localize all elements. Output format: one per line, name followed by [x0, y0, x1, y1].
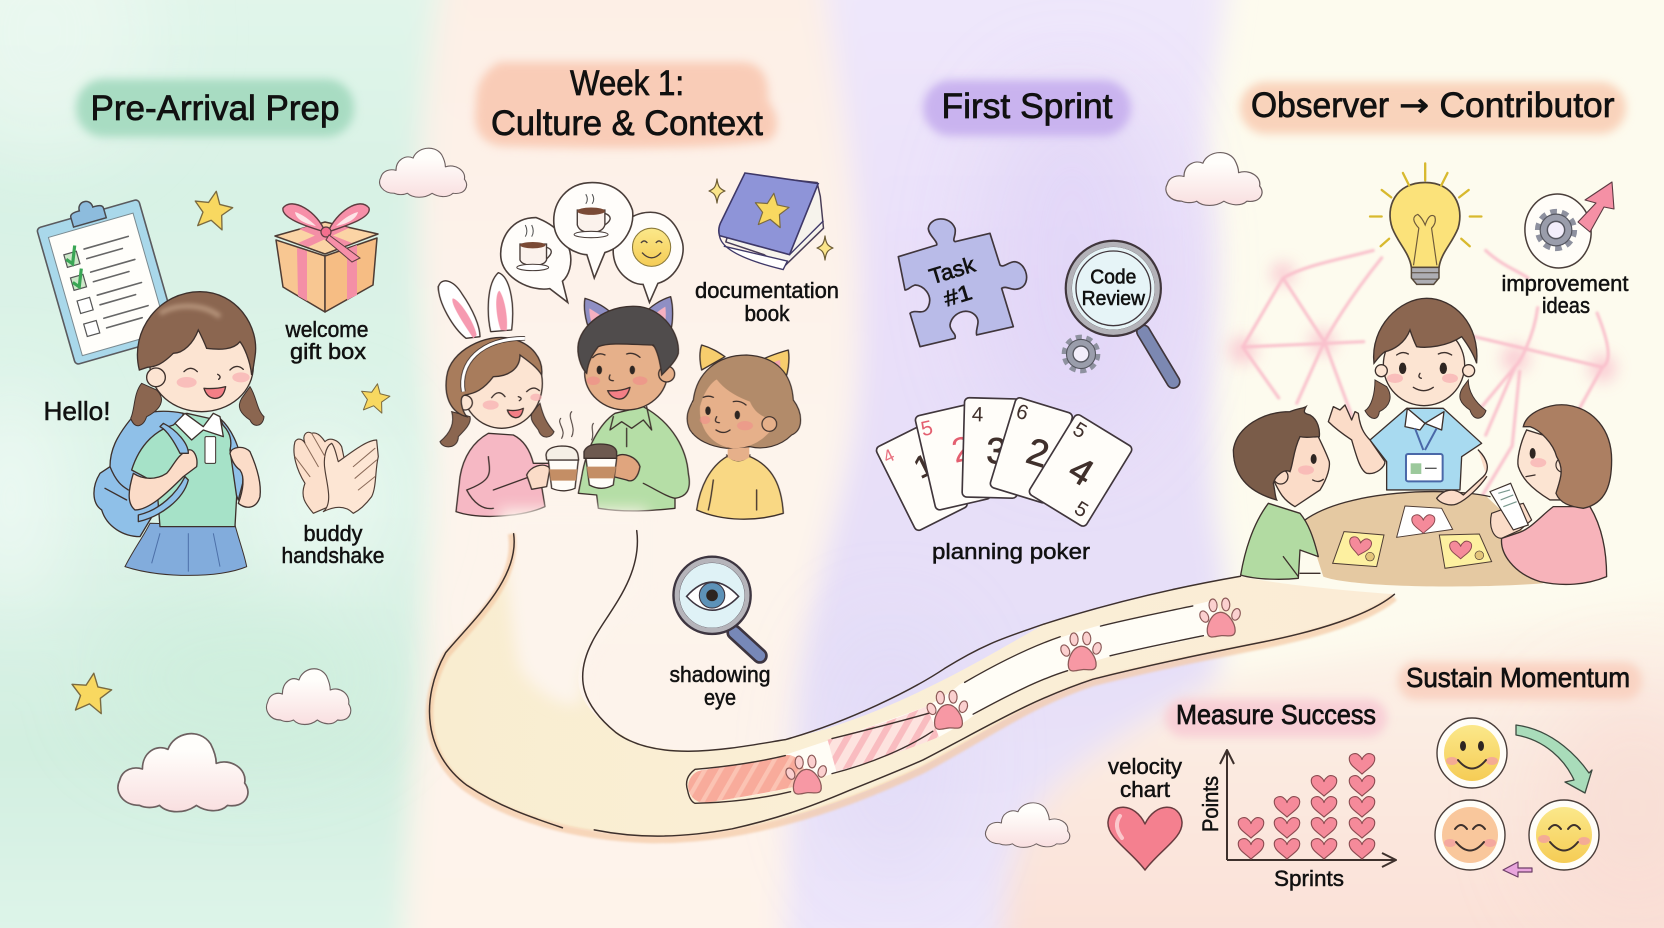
decoration: stars and clouds	[69, 148, 467, 812]
heading pill: Pre-Arrival Prep	[76, 79, 354, 137]
icon: star	[191, 188, 235, 231]
axes	[1220, 750, 1396, 867]
boy listening	[1233, 407, 1329, 579]
scene: team around table	[1233, 298, 1612, 586]
label: Hello: Hello!	[44, 396, 110, 426]
label: welcome gift box: welcome	[285, 317, 368, 342]
label: velocity chart	[1108, 754, 1182, 802]
label: improvement ideas: ideas	[1542, 293, 1590, 318]
label: velocity chart: chart	[1120, 777, 1170, 802]
icon: star	[358, 381, 392, 414]
icon: planning poker cards: 5	[919, 416, 935, 441]
icon: planning poker cards: 2	[948, 429, 976, 471]
heading pill: Pre-Arrival Prep: Pre-Arrival Prep	[90, 89, 340, 128]
icon: improvement gear and arrow	[1520, 182, 1614, 272]
paw prints	[783, 754, 830, 795]
icon: buddy handshake	[294, 432, 378, 513]
label: velocity chart: velocity	[1108, 754, 1182, 779]
label: welcome gift box	[285, 317, 368, 364]
icon: code review magnifier	[1068, 243, 1173, 382]
label: welcome gift box: gift box	[290, 339, 366, 364]
heading pill: Week 1 Culture & Context: Culture & Context	[491, 104, 763, 143]
icon: smiley right	[1529, 800, 1599, 870]
icon: sparkles	[709, 179, 833, 260]
column of hearts 4	[1349, 754, 1375, 859]
label: planning poker: planning poker	[932, 539, 1090, 564]
heading pill: Observer to Contributor	[1240, 82, 1626, 134]
panel: observer to contributor	[1229, 82, 1628, 586]
woman with phone	[1490, 405, 1612, 584]
heading pill: Week 1 Culture & Context: Week 1:	[570, 64, 684, 103]
heading pill: Measure Success: Measure Success	[1176, 699, 1376, 730]
icon: puzzle piece task 1: Task	[926, 251, 979, 289]
icon: code review magnifier: Review	[1082, 287, 1145, 310]
cloud	[986, 803, 1070, 847]
characters: three friends with coffee	[438, 273, 801, 519]
icon: planning poker cards	[875, 397, 1133, 532]
girl with yellow cat ears	[687, 345, 801, 519]
icon: planning poker cards: 5	[1069, 418, 1091, 443]
column of hearts 2	[1274, 797, 1300, 859]
label: shadowing eye: shadowing	[670, 662, 770, 687]
icon: smiley left	[1435, 800, 1505, 870]
chart: velocity hearts	[1198, 750, 1396, 891]
table	[1305, 492, 1543, 586]
label: improvement ideas	[1502, 271, 1628, 318]
heading pill: Observer to Contributor: Observer	[1251, 86, 1389, 125]
icon: gear	[1065, 338, 1097, 370]
icon: planning poker cards: 1	[909, 447, 939, 485]
label: improvement ideas: improvement	[1502, 271, 1628, 296]
icon: puzzle piece task 1: #1	[941, 279, 975, 312]
icon: code review magnifier: Code	[1090, 265, 1136, 288]
panel: sustain momentum	[1398, 662, 1642, 877]
heading pill: First Sprint	[923, 80, 1131, 136]
heading pill: Sustain Momentum: Sustain Momentum	[1406, 662, 1630, 693]
sticky notes	[1333, 506, 1492, 568]
icon: planning poker cards: 2	[1022, 429, 1054, 475]
panel: measure success	[986, 699, 1396, 891]
icon: clipboard checklist	[33, 187, 178, 365]
column of hearts 3	[1311, 776, 1337, 859]
heading pill: Observer to Contributor: →	[1399, 86, 1429, 124]
character: girl with backpack	[94, 292, 264, 575]
road body	[429, 531, 1394, 836]
icon: planning poker cards: 4	[880, 445, 898, 467]
panel: pre-arrival prep	[33, 79, 467, 812]
label: buddy handshake: handshake	[282, 543, 384, 568]
label: documentation book: documentation	[695, 278, 839, 303]
boy with cat ears	[578, 297, 689, 511]
label: documentation book: book	[744, 301, 790, 326]
icon: big heart	[1108, 807, 1182, 870]
icon: puzzle piece task 1	[898, 219, 1027, 347]
label: buddy handshake: buddy	[304, 521, 362, 546]
heading pill: Observer to Contributor: Contributor	[1440, 86, 1615, 125]
label: buddy handshake	[282, 521, 384, 568]
path: winding road with paw prints	[429, 509, 1394, 840]
icon: planning poker cards: 4	[971, 403, 984, 426]
icon: speech bubbles	[501, 183, 683, 302]
icon: shadowing eye magnifier	[676, 559, 760, 656]
road fade into background	[499, 509, 647, 704]
heading pill: First Sprint: First Sprint	[942, 87, 1113, 126]
y axis label: Points	[1198, 776, 1223, 832]
icon: light bulb	[1370, 163, 1481, 284]
icon: documentation book	[719, 173, 823, 270]
label: shadowing eye: eye	[704, 685, 736, 710]
icon: planning poker cards: 4	[1062, 447, 1101, 494]
icon: smiley top	[1437, 718, 1507, 788]
panel: week 1 culture and context	[438, 62, 839, 710]
panel: first sprint	[875, 80, 1262, 564]
icon: welcome gift box	[275, 204, 378, 312]
coffee cups	[546, 412, 617, 491]
icon: planning poker cards: 6	[1013, 400, 1031, 425]
label: shadowing eye	[670, 662, 770, 710]
cloud	[1166, 153, 1262, 205]
network: pink connection lines	[1229, 250, 1616, 499]
girl with bunny ears	[438, 273, 554, 516]
heading pill: Week 1 Culture & Context	[475, 62, 777, 148]
icon: planning poker cards: 5	[1070, 497, 1092, 522]
label: documentation book	[695, 278, 839, 326]
column of hearts 1	[1238, 818, 1264, 859]
band: progress stripe	[700, 615, 1220, 786]
arrow: pink small	[1503, 862, 1532, 877]
icon: planning poker cards: 3	[986, 430, 1007, 472]
arrow: green curved	[1516, 725, 1592, 793]
teacher girl	[1328, 298, 1487, 505]
x axis label: Sprints	[1274, 866, 1344, 891]
